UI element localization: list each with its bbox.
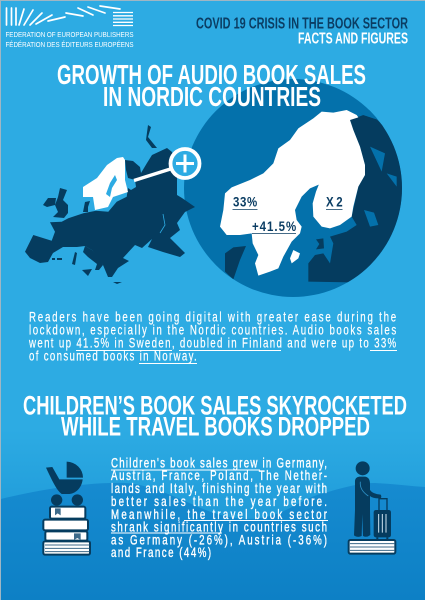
text block: audio books: of consumed books in Norway. — [29, 349, 197, 364]
text block: children's and travel books: better sales than the year before. — [111, 495, 327, 509]
highlighted Nordic countries — [83, 157, 128, 210]
Denmark — [225, 246, 246, 279]
Gotland — [290, 250, 300, 263]
traveller — [354, 461, 381, 537]
text block: audio books: went up 41.5% in Sweden, doubled in Finland and were up to 33% — [28, 336, 397, 351]
text block: children's and travel books: as Germany (-26%), Austria (-36%) — [111, 533, 327, 548]
British Isles and islands — [43, 125, 157, 284]
mainland Europe — [25, 148, 195, 277]
book — [349, 540, 395, 554]
Scandinavia and Finland — [220, 110, 365, 276]
bottom wave background — [1, 483, 425, 600]
logo text: FEDERATION OF EUROPEAN PUBLISHERS — [6, 30, 134, 39]
Norway value: 33% — [233, 195, 257, 210]
zoom connector and plus icon — [134, 149, 200, 180]
text block: children's and travel books: and France (44%) — [111, 546, 211, 560]
text block: audio books — [28, 310, 397, 364]
text block: children's and travel books: shrank significantly in countries such — [111, 520, 327, 535]
header: report title — [196, 16, 408, 48]
heading: audio book sales: IN NORDIC COUNTRIES — [103, 81, 321, 112]
stroller — [46, 462, 83, 506]
icon: stroller on stack of books — [43, 462, 90, 555]
Russia and Baltic landmass — [308, 115, 403, 283]
text block: children's and travel books: lands and Italy, finishing the year with — [111, 482, 327, 496]
text block: audio books: lockdown, especially in the Nordic countries. Audio books sales — [29, 323, 396, 338]
text block: children's and travel books: Austria, France, Poland, The Nether- — [111, 469, 327, 483]
Italy — [83, 246, 103, 270]
logo: Federation of European Publishers: FÉDÉRATION DES ÉDITEURS EUROPÉENS — [6, 40, 134, 49]
suitcase — [379, 499, 387, 510]
Europe map — [25, 125, 195, 284]
text block: children's and travel books: Meanwhile, the travel book sector — [111, 508, 327, 522]
text block: children's and travel books: Children's book sales grew in Germany, — [111, 456, 327, 471]
Finland value: X2 — [326, 195, 343, 210]
text block: audio books: Readers have been going digital with greater ease during the — [29, 310, 397, 325]
logo mark — [6, 6, 133, 26]
text block: children's and travel books — [111, 456, 328, 560]
heading: audio book sales — [57, 59, 366, 112]
map labels — [232, 195, 343, 234]
logo: Federation of European Publishers — [6, 6, 134, 49]
heading: children's and travel books — [23, 390, 407, 442]
book stack — [43, 507, 90, 555]
icon: traveller with suitcase on book — [349, 461, 395, 554]
magnified Nordic map circle — [184, 79, 403, 297]
Sweden value: +41.5% — [252, 219, 296, 234]
